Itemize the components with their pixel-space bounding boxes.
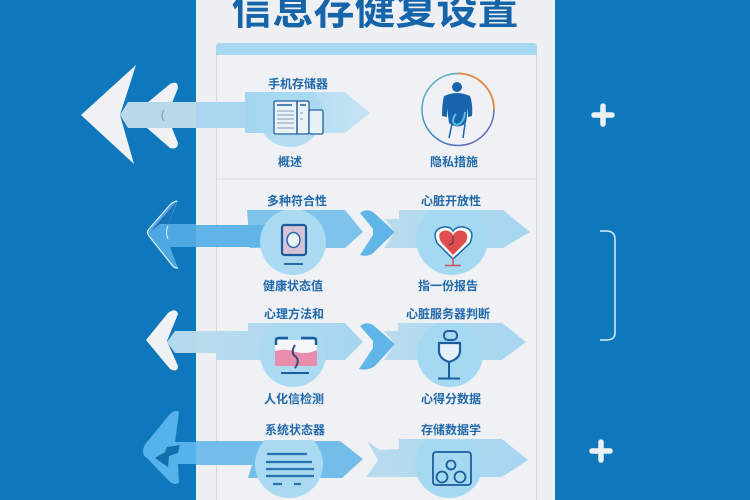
row 3 labels: 人化信检测 [264, 391, 324, 406]
row 1: left arrowheads [81, 65, 246, 164]
row 3: arrow with skin icon [216, 323, 363, 387]
row 1 labels: 手机存储器 [268, 76, 328, 91]
icon: heart [435, 227, 472, 266]
row 2 labels [263, 193, 490, 321]
row 2: left arrowhead [147, 201, 196, 268]
row 3: left arrowhead [146, 310, 250, 370]
plus bottom right [592, 442, 610, 460]
row 1: arrow with document icon [196, 92, 370, 147]
row 1 labels: 隐私措施 [430, 154, 478, 169]
row 2 labels: 心脏服务器判断 [406, 306, 490, 321]
icon: molecule box [433, 452, 471, 485]
row 3 labels: 存储数据学 [421, 422, 481, 437]
bracket right [600, 231, 615, 340]
row 2: chevron [360, 210, 395, 256]
row 2 labels: 心理方法和 [264, 306, 324, 321]
row 3: chevron [359, 323, 395, 370]
main panel [196, 0, 555, 500]
row 3 labels [264, 391, 481, 437]
row 4: left arrowhead [143, 411, 196, 484]
row 3: arrow with lab icon [384, 321, 526, 387]
content frame [216, 43, 537, 500]
icon: funnel stand [438, 331, 461, 378]
icon: document [274, 101, 323, 134]
icon: tablet [282, 225, 306, 264]
row 2 labels: 指一份报告 [418, 278, 478, 293]
row 1 labels: 概述 [278, 154, 302, 169]
icon: text lines [266, 454, 314, 484]
plus top right [594, 106, 612, 124]
row 2: arrow with heart icon [384, 203, 530, 275]
row 3 labels: 心得分数据 [421, 391, 481, 406]
row 4: arrow with data icon [366, 439, 528, 498]
row 1: body icon [422, 74, 494, 146]
icon: cross-section [275, 338, 317, 373]
row 2 labels: 心脏开放性 [421, 193, 481, 208]
row 4: arrow with text icon [196, 440, 363, 498]
row 2: arrow with tablet icon [196, 209, 363, 275]
row 2 labels: 健康状态值 [263, 278, 323, 293]
row 3 labels: 系统状态器 [265, 422, 325, 437]
row 2 labels: 多种符合性 [267, 193, 327, 208]
row 1 labels [268, 76, 478, 169]
